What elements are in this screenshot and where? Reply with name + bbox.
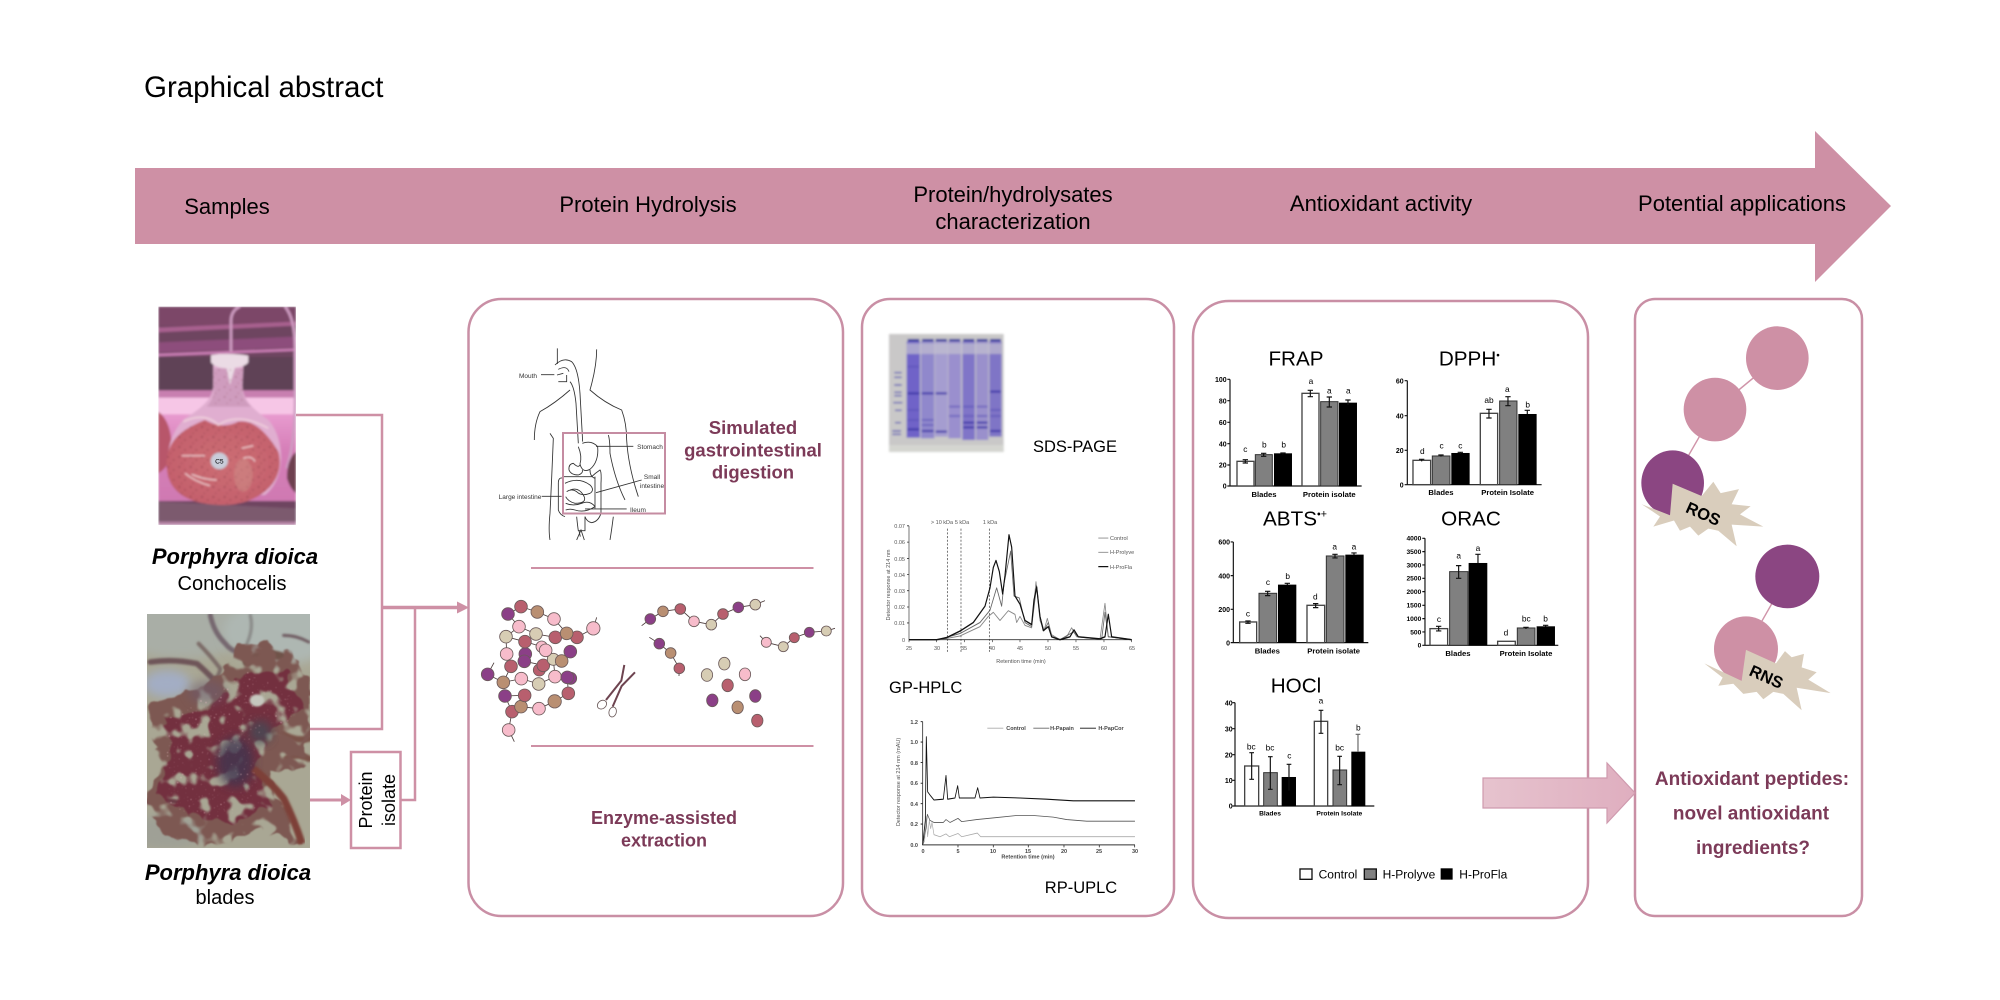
chart: FRAP: a	[1346, 385, 1351, 395]
chart: DPPH: Blades	[1428, 488, 1454, 497]
chart: HOCl: bc	[1266, 742, 1274, 752]
text: antioxidant peptides conclusion: novel antioxidant	[1673, 804, 1830, 824]
chart: ORAC: 2000	[1406, 589, 1422, 596]
chart: DPPH: c	[1458, 440, 1462, 450]
chart: ORAC: 0	[1418, 643, 1422, 650]
chart: ORAC	[1406, 507, 1558, 658]
chart: FRAP: 100	[1215, 377, 1227, 384]
chart: DPPH: DPPH	[1439, 348, 1496, 371]
chart: GP-HPLC chromatogram: 0.02	[894, 605, 905, 611]
chart: GP-HPLC chromatogram: H-Prolyve	[1110, 550, 1134, 556]
chart: RP-UPLC chromatogram: Control	[1006, 726, 1026, 732]
chart: RP-UPLC chromatogram: 0.2	[910, 822, 918, 828]
chart: ABTS: b	[1285, 571, 1290, 581]
peptide: ROS scavenging: ROS	[1683, 499, 1723, 530]
text: enzyme-assisted extraction: extraction	[621, 830, 707, 850]
panel: antioxidant activity	[1193, 301, 1588, 918]
chart: DPPH: 20	[1396, 448, 1404, 455]
chart: GP-HPLC chromatogram	[886, 520, 1135, 665]
stage: characterization: Protein/hydrolysates	[913, 182, 1113, 207]
chart: HOCl: 30	[1225, 726, 1233, 733]
chart: HOCl: 20	[1225, 752, 1233, 759]
label: Porphyra dioica conchocelis: Conchocelis	[178, 573, 286, 595]
chart: HOCl: bc	[1247, 741, 1256, 751]
stage: potential applications: Potential applications	[1638, 191, 1846, 216]
chart: FRAP: b	[1281, 439, 1286, 449]
chart: RP-UPLC chromatogram: Retention time (min)	[1001, 854, 1055, 860]
chart: ORAC: ORAC	[1441, 507, 1501, 530]
stage: antioxidant activity: Antioxidant activity	[1290, 191, 1472, 216]
label: SDS-PAGE: SDS-PAGE	[1033, 438, 1117, 456]
text: enzyme-assisted extraction: Enzyme-assisted	[591, 808, 737, 828]
text: simulated gastrointestinal digestion: gastrointestinal	[684, 440, 822, 460]
stage: protein hydrolysis: Protein Hydrolysis	[559, 192, 737, 217]
chart: ORAC: 1000	[1406, 616, 1422, 623]
text: antioxidant peptides conclusion: Antioxidant peptides:	[1655, 769, 1849, 790]
peptide: RNS scavenging: RNS	[1746, 662, 1786, 693]
diagram: human digestive tract: Ileum	[630, 507, 646, 514]
chart: ORAC: c	[1437, 614, 1441, 624]
chart: GP-HPLC chromatogram: 40	[989, 646, 995, 652]
chart: GP-HPLC chromatogram: 1 kDa	[983, 520, 998, 526]
label: Porphyra dioica conchocelis: Porphyra dioica	[152, 544, 318, 569]
chart: FRAP: 20	[1219, 463, 1227, 470]
chart: ORAC: b	[1543, 614, 1548, 624]
photo: porphyra blades	[147, 614, 310, 848]
chart: RP-UPLC chromatogram: 10	[990, 849, 996, 855]
label: Porphyra dioica blades	[145, 860, 311, 909]
divider bottom	[531, 745, 814, 747]
chart: ABTS: d	[1313, 591, 1318, 601]
chart: ABTS: c	[1266, 577, 1270, 587]
chart: ABTS: 0	[1226, 640, 1230, 647]
chart: GP-HPLC chromatogram: 30	[934, 646, 940, 652]
chart: FRAP: Blades	[1251, 490, 1277, 499]
diagram: human digestive tract	[499, 348, 665, 540]
chart: RP-UPLC chromatogram: 0	[921, 849, 925, 855]
chart: DPPH: 0	[1400, 482, 1404, 489]
chart: DPPH: •	[1496, 350, 1500, 361]
connector arrows from samples	[296, 415, 469, 806]
diagram: human digestive tract: Mouth	[519, 373, 537, 380]
stage: samples: Samples	[184, 194, 270, 219]
chart: GP-HPLC chromatogram: H-ProFla	[1110, 565, 1133, 571]
diagram: human digestive tract: intestine	[640, 483, 664, 490]
chart: RP-UPLC chromatogram: 0.6	[910, 781, 918, 787]
chart: RP-UPLC chromatogram	[896, 720, 1138, 860]
chart: DPPH	[1396, 348, 1542, 497]
chart: GP-HPLC chromatogram: 0	[902, 638, 905, 644]
chart: DPPH: 60	[1396, 378, 1404, 385]
chart: ORAC: 500	[1410, 629, 1422, 636]
chart: FRAP: c	[1243, 444, 1247, 454]
text: antioxidant peptides conclusion: ingredients?	[1696, 838, 1810, 859]
chart: GP-HPLC chromatogram: 50	[1045, 646, 1051, 652]
chart: GP-HPLC chromatogram: 0.06	[894, 540, 905, 546]
protein isolate box: isolate	[379, 774, 399, 826]
chart: RP-UPLC chromatogram: 1.2	[910, 720, 918, 726]
arrow shape	[135, 131, 1891, 282]
chart: RP-UPLC chromatogram: 0.0	[910, 843, 918, 849]
chart: FRAP	[1215, 348, 1362, 499]
arrow: antioxidant activity to applications	[1483, 763, 1635, 823]
chart: HOCl: 0	[1229, 804, 1233, 811]
chart: GP-HPLC chromatogram: 0.01	[894, 621, 905, 627]
chart: FRAP: a	[1309, 376, 1314, 386]
chart: ABTS: Protein isolate	[1307, 647, 1360, 656]
chart: ABTS: 600	[1218, 540, 1230, 547]
chart: FRAP: 60	[1219, 420, 1227, 427]
chart: ABTS: a	[1332, 541, 1337, 551]
chart: FRAP: 0	[1223, 484, 1227, 491]
chart: GP-HPLC chromatogram: 55	[1073, 646, 1079, 652]
photo: conchocelis flask	[158, 307, 296, 525]
chart: FRAP: b	[1262, 439, 1267, 449]
chart: RP-UPLC chromatogram: 0.4	[910, 802, 919, 808]
legend: Control	[1319, 868, 1357, 882]
chart: RP-UPLC chromatogram: 5	[956, 849, 960, 855]
stage: characterization: characterization	[935, 209, 1091, 234]
label: Porphyra dioica conchocelis	[152, 544, 318, 595]
chart: RP-UPLC chromatogram: 15	[1025, 849, 1031, 855]
chart: ORAC: 3000	[1406, 562, 1422, 569]
chart: HOCl: Blades	[1259, 810, 1281, 817]
image: SDS-PAGE gel	[889, 334, 1004, 452]
chart: HOCl: c	[1287, 751, 1291, 761]
legend: H-ProFla	[1459, 868, 1508, 882]
chart: GP-HPLC chromatogram: 5 kDa	[955, 520, 970, 526]
text: simulated gastrointestinal digestion: digestion	[712, 462, 794, 482]
chart: ORAC: bc	[1522, 614, 1531, 624]
chart: DPPH: a	[1505, 384, 1510, 394]
label: RP-UPLC: RP-UPLC	[1045, 879, 1117, 897]
chart: HOCl: a	[1319, 695, 1324, 705]
chart: ORAC: Protein Isolate	[1500, 649, 1552, 658]
chart: RP-UPLC chromatogram: 25	[1096, 849, 1102, 855]
peptide: ROS scavenging	[1641, 326, 1809, 546]
text: simulated gastrointestinal digestion: Simulated	[709, 417, 797, 438]
chart: FRAP: FRAP	[1268, 348, 1324, 371]
chart: GP-HPLC chromatogram: 45	[1017, 646, 1023, 652]
chart: DPPH: d	[1420, 446, 1425, 456]
diagram: human digestive tract: Small	[644, 474, 661, 481]
legend: H-Prolyve	[1383, 868, 1436, 882]
chart: GP-HPLC chromatogram: 65	[1129, 646, 1135, 652]
title: Graphical abstract	[144, 71, 383, 104]
chart: GP-HPLC chromatogram: 25	[906, 646, 912, 652]
chart: HOCl: b	[1356, 723, 1361, 733]
chart: GP-HPLC chromatogram: Detector response at 214 nm	[886, 549, 892, 620]
protein isolate box: Protein	[356, 771, 376, 829]
panel: protein hydrolysis	[468, 299, 843, 916]
chart: ORAC: 2500	[1406, 576, 1422, 583]
chart: RP-UPLC chromatogram: H-Papain	[1050, 726, 1075, 732]
chart: FRAP: 80	[1219, 398, 1227, 405]
chart: FRAP: a	[1327, 385, 1332, 395]
chart: ORAC: a	[1456, 551, 1461, 561]
chart: RP-UPLC chromatogram: 20	[1061, 849, 1067, 855]
chart: ABTS: ABTS	[1263, 507, 1317, 530]
diagram: human digestive tract: Large intestine	[499, 494, 542, 501]
workflow arrow with stage labels	[135, 131, 1891, 282]
diagram: human digestive tract: Stomach	[637, 444, 663, 451]
chart: ORAC: 4000	[1406, 536, 1422, 543]
chart: RP-UPLC chromatogram: Detector response at 214 nm (mAU)	[896, 738, 902, 826]
label: Porphyra dioica blades: blades	[196, 887, 254, 909]
divider top	[531, 567, 814, 569]
photo: conchocelis flask: C5	[215, 459, 224, 466]
label: GP-HPLC: GP-HPLC	[889, 679, 962, 697]
chart: GP-HPLC chromatogram: 60	[1101, 646, 1107, 652]
chart: RP-UPLC chromatogram: 0.8	[910, 761, 918, 767]
chart: ABTS: Blades	[1255, 647, 1280, 656]
chart: RP-UPLC chromatogram: 1.0	[910, 740, 918, 746]
panel: potential applications	[1635, 299, 1862, 916]
chart: GP-HPLC chromatogram: > 10 kDa	[931, 520, 954, 526]
chart: HOCl: Protein Isolate	[1316, 810, 1363, 817]
chart: HOCl	[1225, 674, 1374, 817]
chart: DPPH: ab	[1484, 395, 1494, 405]
chart: ORAC: d	[1504, 628, 1509, 638]
illustration: peptide beads and scissors	[481, 599, 835, 742]
chart: GP-HPLC chromatogram: 0.07	[894, 524, 905, 530]
chart: GP-HPLC chromatogram: Retention time (min)	[996, 659, 1046, 665]
chart: HOCl: 10	[1225, 778, 1233, 785]
chart: DPPH: c	[1440, 440, 1444, 450]
chart: ABTS: 400	[1218, 573, 1230, 580]
chart: RP-UPLC chromatogram: H-PapCor	[1098, 726, 1125, 732]
chart: ABTS: •+	[1317, 508, 1327, 520]
chart: DPPH: Protein Isolate	[1481, 488, 1534, 497]
protein isolate box	[351, 752, 400, 848]
chart: RP-UPLC chromatogram: 30	[1132, 849, 1138, 855]
chart: ORAC: Blades	[1445, 649, 1471, 658]
chart: ORAC: 1500	[1406, 603, 1422, 610]
chart: ORAC: 3500	[1406, 549, 1422, 556]
chart: ABTS: c	[1246, 609, 1250, 619]
label: Porphyra dioica blades: Porphyra dioica	[145, 860, 311, 885]
chart: GP-HPLC chromatogram: 0.03	[894, 589, 905, 595]
chart: GP-HPLC chromatogram: 35	[961, 646, 967, 652]
chart: ABTS	[1218, 507, 1368, 656]
chart: GP-HPLC chromatogram: 0.04	[894, 573, 905, 579]
chart: HOCl: HOCl	[1271, 674, 1321, 697]
chart: DPPH: 40	[1396, 413, 1404, 420]
legend	[1300, 868, 1508, 882]
seaweed strands	[149, 615, 309, 805]
chart: FRAP: Protein isolate	[1303, 490, 1356, 499]
chart: DPPH: b	[1525, 400, 1530, 410]
chart: GP-HPLC chromatogram: 0.05	[894, 557, 905, 563]
chart: ABTS: 200	[1218, 607, 1230, 614]
chart: HOCl: bc	[1335, 742, 1344, 752]
chart: ORAC: a	[1476, 543, 1481, 553]
chart: HOCl: 40	[1225, 700, 1233, 707]
chart: ABTS: a	[1352, 541, 1357, 551]
panel: characterization	[862, 299, 1174, 916]
chart: FRAP: 40	[1219, 441, 1227, 448]
peptide: RNS scavenging	[1704, 545, 1831, 710]
chart: GP-HPLC chromatogram: Control	[1110, 536, 1128, 542]
